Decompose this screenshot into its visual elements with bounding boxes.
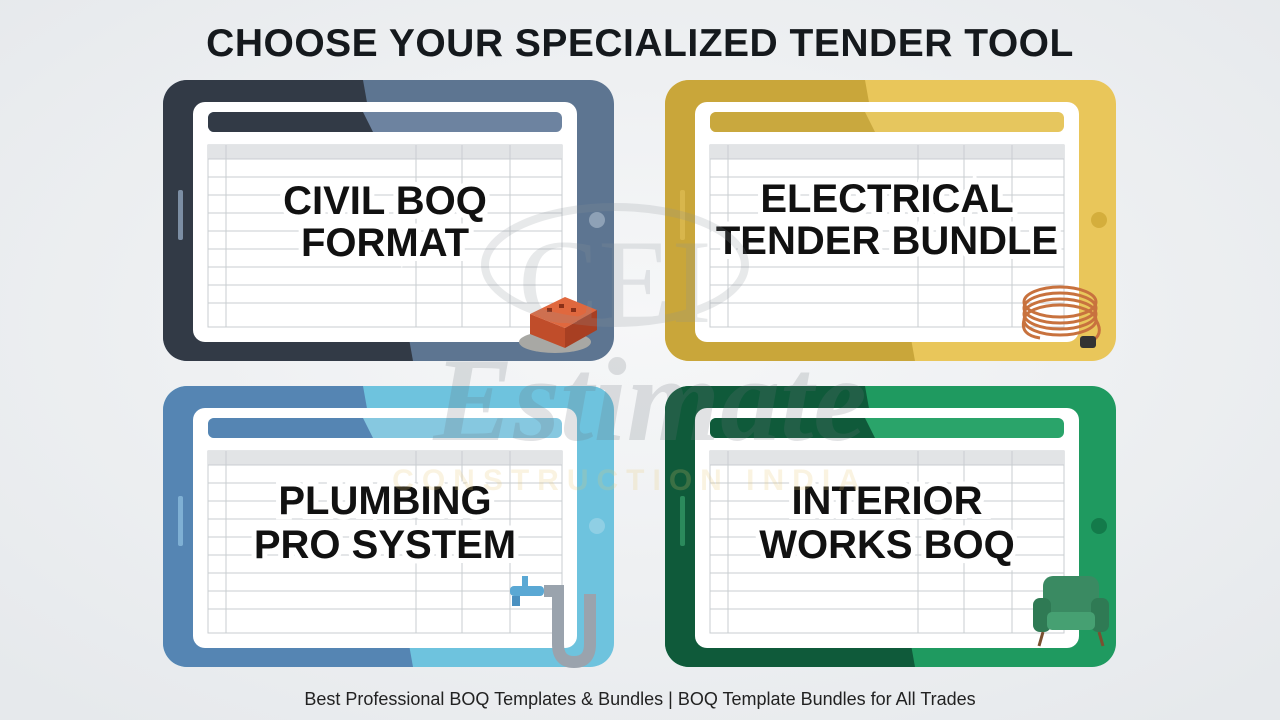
panel: electrical tender bundle (665, 80, 1116, 361)
heading: interior works boq: WORKS BOQ (759, 523, 1015, 567)
heading: electrical tender bundle: ELECTRICAL (760, 177, 1014, 221)
watermark: Estimate (432, 333, 867, 466)
watermark: CONSTRUCTION INDIA (392, 464, 868, 497)
heading: interior works boq: INTERIOR (791, 479, 983, 523)
icon: tap and pipe (510, 576, 590, 662)
title: CHOOSE YOUR SPECIALIZED TENDER TOOL (206, 22, 1074, 65)
panel: plumbing pro system (163, 386, 614, 667)
heading: civil boq format: CIVIL BOQ (283, 179, 487, 223)
footer text: Best Professional BOQ Templates & Bundles | BOQ Template Bundles for All Trades (304, 689, 976, 709)
icon: copper cable (1023, 287, 1099, 348)
panel: civil boq format (163, 80, 614, 361)
heading: electrical tender bundle: TENDER BUNDLE (716, 219, 1058, 263)
heading: civil boq format: FORMAT (301, 221, 469, 265)
watermark (392, 207, 868, 497)
panel: interior works boq (665, 386, 1116, 667)
heading: plumbing pro system: PLUMBING (278, 479, 492, 523)
watermark: CEI (518, 215, 712, 348)
heading: plumbing pro system: PRO SYSTEM (254, 523, 516, 567)
icon: armchair (1033, 576, 1109, 646)
icon: brick (519, 297, 597, 353)
